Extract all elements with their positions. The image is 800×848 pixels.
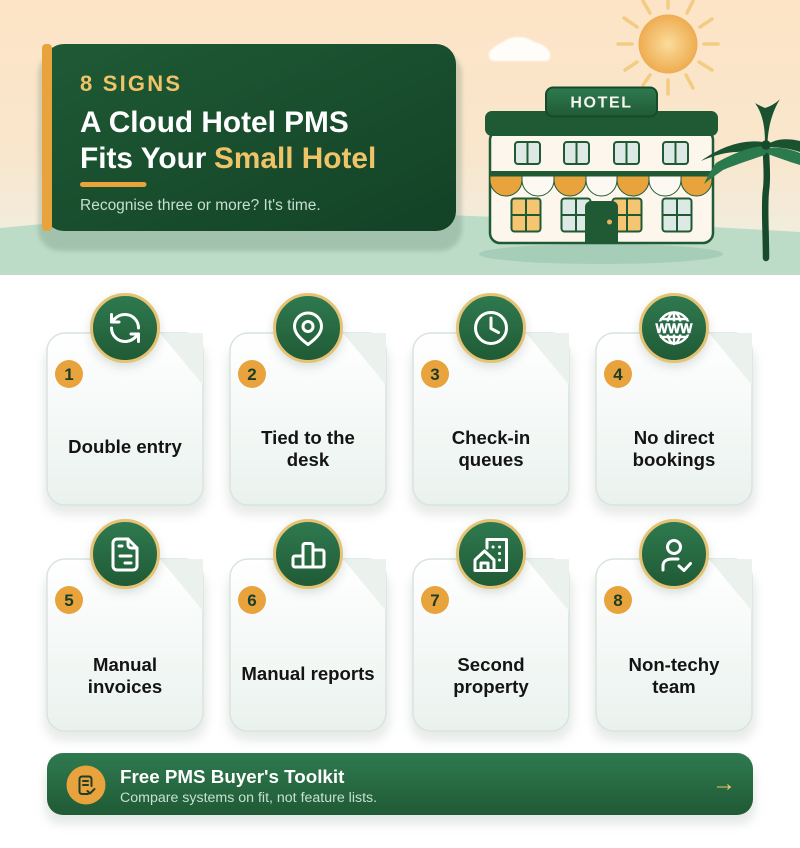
card 8: non-techy team: team (652, 676, 696, 697)
door (585, 201, 618, 243)
hero background sky (0, 0, 800, 275)
accent bar (42, 44, 52, 231)
lower windows (512, 198, 692, 232)
hero panel shadow (38, 52, 462, 251)
awning (490, 176, 712, 196)
card 6: manual reports (227, 520, 390, 741)
card 2: tied to the desk: Tied to the (261, 427, 355, 448)
icon: www globe: WWW (656, 320, 693, 336)
card 4: no direct bookings (593, 294, 756, 515)
hotel sign: HOTEL (570, 94, 633, 112)
card 4: no direct bookings: bookings (633, 449, 715, 470)
card 3: check-in queues (410, 294, 573, 515)
card 1: double entry (44, 294, 207, 515)
arrow: → (712, 770, 736, 797)
card 1: double entry: Double entry (68, 436, 182, 457)
card 1: double entry: 1 (64, 365, 74, 384)
illustration: hotel building (485, 88, 718, 243)
hotel ground shadow (479, 244, 723, 264)
icon: refresh (112, 314, 138, 342)
card 2: tied to the desk: desk (287, 449, 330, 470)
card 6: manual reports: 6 (247, 591, 257, 610)
palm crown (761, 140, 771, 150)
card 5: manual invoices: Manual (93, 654, 157, 675)
title: Small Hotel (214, 142, 376, 175)
awning band (490, 171, 713, 176)
icon: clock (476, 312, 506, 344)
card 2: tied to the desk (227, 294, 390, 515)
icon: cloud (489, 37, 550, 61)
ground hill (0, 212, 800, 275)
card 8: non-techy team: 8 (613, 591, 623, 610)
hotel body (490, 130, 713, 243)
card 7: second property: property (453, 676, 529, 697)
icon: bar chart (293, 544, 324, 567)
card 4: no direct bookings: No direct (634, 427, 714, 448)
card 7: second property (410, 520, 573, 741)
title: A Cloud Hotel PMS (80, 106, 349, 139)
hero title panel (42, 44, 456, 231)
card 6: manual reports: Manual reports (241, 663, 375, 684)
footer call to action (47, 753, 753, 815)
card 8: non-techy team: Non-techy (629, 654, 720, 675)
palm light leaves (704, 146, 800, 184)
icon: sun (618, 0, 718, 94)
title: Fits Your (80, 142, 206, 175)
palm trunk (765, 146, 767, 258)
icon: invoice (113, 539, 137, 570)
title (80, 106, 376, 175)
palm top leaf (755, 99, 780, 143)
card 5: manual invoices: 5 (64, 591, 74, 610)
card 3: check-in queues: queues (458, 449, 524, 470)
upper windows (515, 142, 688, 164)
eyebrow: 8 SIGNS (80, 71, 182, 96)
icon: www globe (655, 312, 693, 344)
card 8: non-techy team (593, 520, 756, 741)
card 3: check-in queues: Check-in (452, 427, 530, 448)
door knob (607, 220, 612, 224)
card 7: second property: 7 (430, 591, 440, 610)
icon: map pin (294, 313, 322, 344)
illustration: palm tree (701, 99, 800, 258)
title rule (80, 182, 146, 187)
card 3: check-in queues: 3 (430, 365, 440, 384)
card 5: manual invoices (44, 520, 207, 741)
roof (485, 111, 718, 136)
palm dark leaves (701, 139, 800, 161)
card 4: no direct bookings: 4 (613, 365, 623, 384)
icon: person with check (663, 540, 690, 570)
card 2: tied to the desk: 2 (247, 365, 257, 384)
card 5: manual invoices: invoices (88, 676, 162, 697)
hotel sign (546, 88, 657, 116)
footer subtitle: Compare systems on fit, not feature lists. (120, 790, 377, 806)
subtitle: Recognise three or more? It's time. (80, 197, 321, 214)
icon: toolkit checklist (66, 766, 106, 804)
icon: buildings (475, 540, 506, 570)
card 7: second property: Second (457, 654, 525, 675)
footer title: Free PMS Buyer's Toolkit (120, 766, 345, 787)
footer bar shadow (45, 764, 755, 824)
